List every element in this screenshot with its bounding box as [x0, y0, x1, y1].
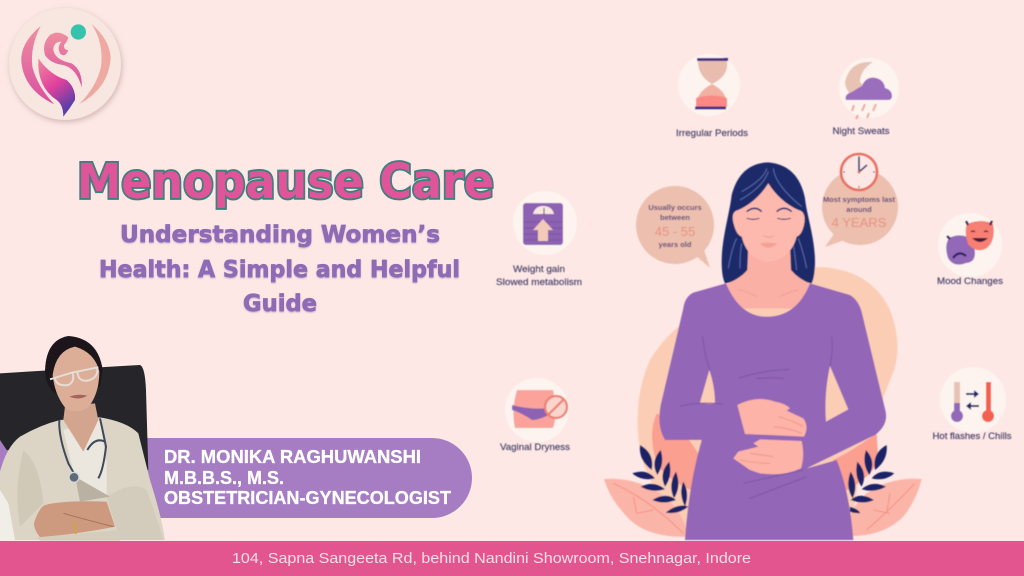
- symptom: night sweats: [832, 58, 899, 137]
- symptom: hot flashes: [932, 367, 1012, 442]
- symptom: irregular periods: Irregular Periods: [676, 128, 748, 139]
- illustration: woman with symptoms: [496, 54, 1012, 540]
- subtitle: Understanding Women’s: [120, 222, 440, 248]
- lower hand: [733, 439, 803, 474]
- subtitle: Guide: [243, 291, 317, 317]
- doctor credentials: OBSTETRICIAN-GYNECOLOGIST: [164, 488, 451, 508]
- doctor credentials: [164, 447, 451, 508]
- navy sprigs left: [632, 445, 688, 513]
- peach blob background: [638, 267, 898, 537]
- speech bubble: symptom duration: 4 YEARS: [832, 215, 887, 230]
- doctor credentials: M.B.B.S., M.S.: [164, 468, 284, 488]
- speech bubble: symptom duration: [822, 169, 898, 247]
- pink front leaves: [604, 479, 688, 537]
- icon: moon and cloud: [839, 58, 899, 119]
- facial features: [747, 208, 792, 212]
- speech bubble: age range: between: [660, 213, 690, 222]
- navy sprigs right: [848, 445, 894, 513]
- icon: thermometers: [940, 367, 1006, 433]
- leaves: [604, 413, 922, 537]
- shirt folds: [680, 337, 832, 498]
- logo badge: [9, 8, 121, 120]
- address text: 104, Sapna Sangeeta Rd, behind Nandini Showroom, Snehnagar, Indore: [232, 550, 751, 567]
- icon: clock: [841, 154, 877, 190]
- stethoscope: [59, 418, 106, 478]
- symptom: weight gain: [496, 191, 582, 288]
- torso and arms: [659, 283, 886, 540]
- face: [53, 347, 99, 411]
- icon: scale: [513, 191, 577, 255]
- speech bubble: age range: Usually occurs: [648, 203, 702, 212]
- address bar: [0, 541, 1024, 576]
- symptom: weight gain: Weight gain: [513, 264, 565, 275]
- speech bubble: age range: 45 - 55: [655, 224, 695, 239]
- doctor name pill: [0, 438, 472, 518]
- subtitle: [99, 222, 460, 317]
- hair highlights: [728, 168, 807, 270]
- hair: [45, 336, 103, 393]
- symptom: vaginal dryness: Vaginal Dryness: [500, 442, 570, 453]
- doctor portrait: [0, 336, 165, 541]
- lips: [69, 395, 87, 398]
- speech bubble: symptom duration: around: [846, 205, 872, 214]
- hair: [722, 162, 815, 283]
- icon: theatre masks: [938, 213, 1002, 277]
- neck: [717, 245, 823, 308]
- glasses: [50, 367, 98, 385]
- icon: crossed underwear: [505, 378, 569, 442]
- salmon back leaves: [652, 413, 700, 493]
- speech bubble: age range: [636, 186, 714, 268]
- speech bubble: symptom duration: Most symptoms last: [823, 195, 896, 204]
- subtitle: Health: A Simple and Helpful: [99, 257, 460, 283]
- upper hand: [737, 399, 806, 437]
- symptom: night sweats: Night Sweats: [832, 126, 890, 137]
- symptom: mood changes: [937, 213, 1003, 287]
- symptom: vaginal dryness: [500, 378, 570, 453]
- icon: hourglass: [678, 54, 740, 116]
- face: [733, 183, 805, 262]
- crossed arms: [34, 501, 115, 537]
- white kurta and shawl: [0, 417, 165, 540]
- neck: [63, 403, 98, 452]
- symptom: hot flashes: Hot flashes / Chills: [932, 431, 1012, 442]
- speech bubble: age range: years old: [659, 240, 692, 249]
- gaps between arms and torso: [700, 370, 715, 404]
- head and hair: [717, 162, 823, 308]
- symptom: weight gain: Slowed metabolism: [496, 277, 582, 288]
- doctor credentials: DR. MONIKA RAGHUWANSHI: [164, 447, 421, 467]
- office chair: [0, 365, 148, 470]
- symptom: irregular periods: [676, 54, 748, 139]
- symptom: mood changes: Mood Changes: [937, 276, 1003, 287]
- title: Menopause Care: [77, 154, 494, 210]
